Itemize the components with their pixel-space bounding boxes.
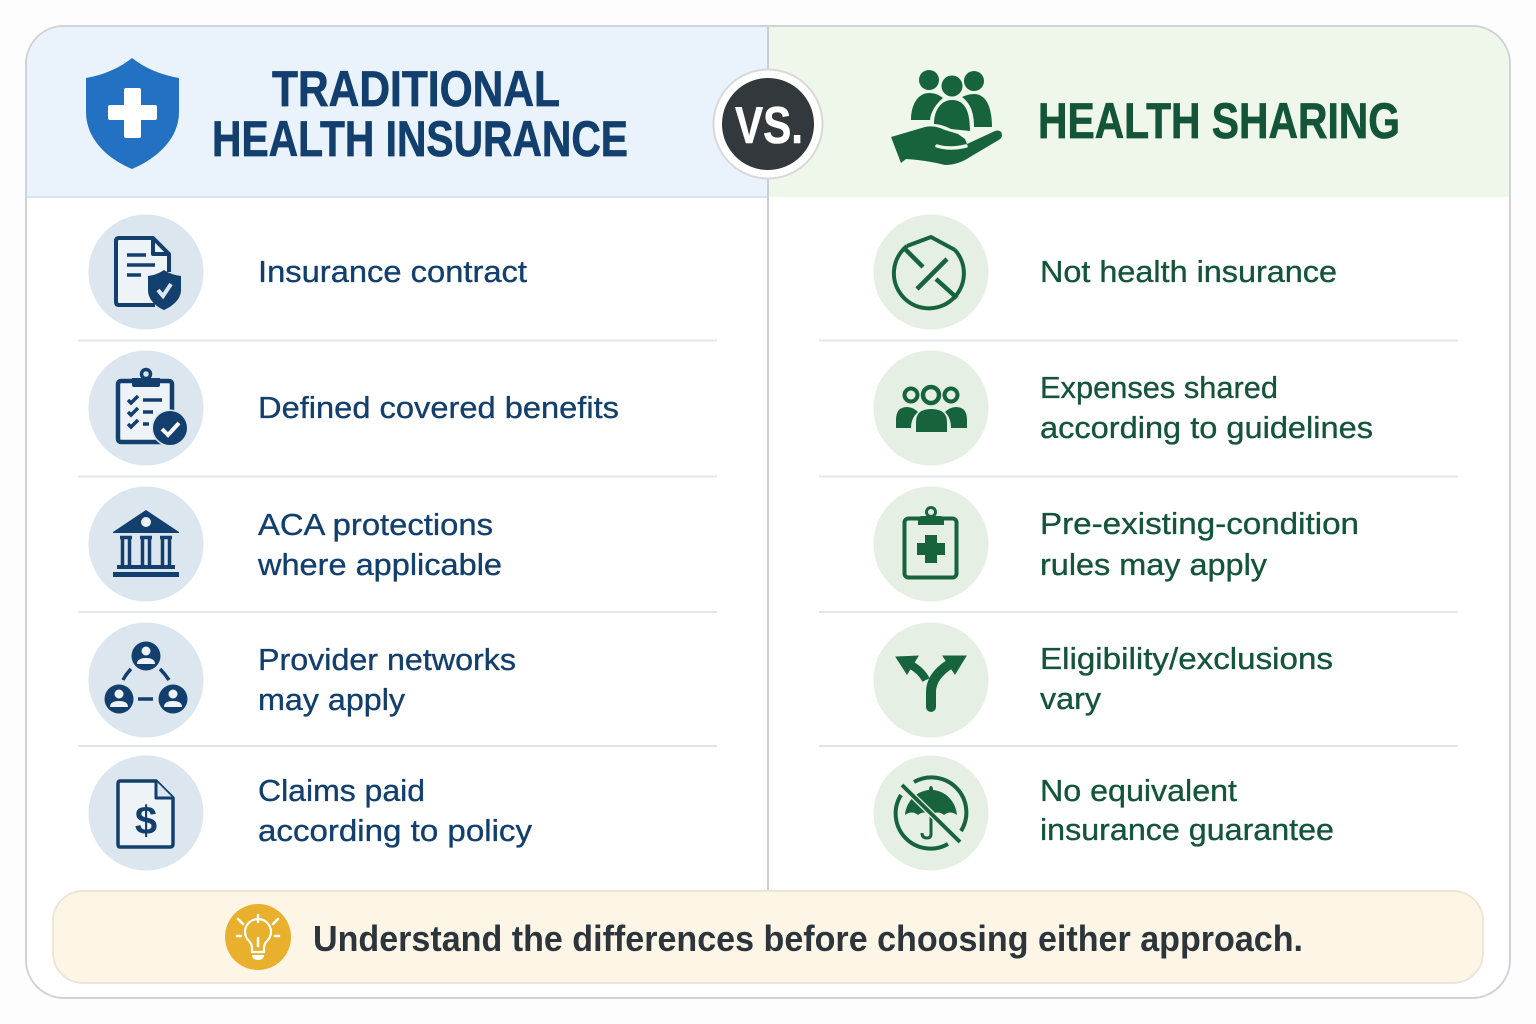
- icon: forking arrows: [874, 622, 988, 738]
- label: defined covered benefits: Defined covered benefits: [258, 390, 619, 425]
- heading: traditional health insurance: [212, 61, 628, 167]
- label: no guarantee: No equivalent: [1040, 773, 1237, 808]
- icon: clipboard checklist: [88, 350, 204, 466]
- label: provider networks: Provider networks: [258, 642, 516, 677]
- label: aca protections: where applicable: [257, 547, 502, 582]
- header: health sharing background: [769, 27, 1509, 197]
- label: claims paid: Claims paid: [258, 773, 425, 808]
- label: insurance contract: Insurance contract: [258, 254, 527, 289]
- icon: bill with dollar: $: [135, 799, 157, 843]
- label: pre-existing condition: rules may apply: [1040, 547, 1268, 582]
- label: expenses shared: Expenses shared: [1040, 370, 1278, 405]
- badge: vs: VS.: [735, 97, 803, 155]
- label: expenses shared: according to guidelines: [1040, 410, 1373, 445]
- icon: government building: [88, 486, 204, 602]
- row: eligibility: [874, 622, 1333, 738]
- icon: umbrella crossed out: [874, 756, 988, 870]
- icon: hand holding people: [891, 70, 1002, 165]
- heading: health sharing: HEALTH SHARING: [1038, 93, 1400, 149]
- label: claims paid: [258, 773, 533, 848]
- heading: traditional health insurance: HEALTH INSURANCE: [212, 111, 628, 167]
- icon: contract with shield: [88, 214, 204, 330]
- row: provider networks: [88, 622, 516, 738]
- text: takeaway: Understand the differences before choosing either approach.: [313, 918, 1303, 959]
- row: defined covered benefits: [88, 350, 619, 466]
- panel: health sharing: [769, 27, 1509, 870]
- label: pre-existing condition: Pre-existing-condition: [1040, 506, 1359, 541]
- callout: takeaway banner: [53, 891, 1483, 983]
- badge: vs: [714, 70, 822, 178]
- row: insurance contract: [88, 214, 527, 330]
- label: aca protections: [257, 507, 502, 582]
- row: pre-existing condition: [874, 486, 1359, 602]
- icon: group of three people: [874, 350, 988, 466]
- header: traditional background: [27, 27, 768, 197]
- label: eligibility: vary: [1040, 681, 1102, 716]
- icon: medical clipboard: [874, 486, 988, 602]
- label: aca protections: ACA protections: [258, 507, 493, 542]
- label: claims paid: according to policy: [258, 813, 533, 848]
- icon: blue shield with cross: [86, 58, 179, 169]
- label: eligibility: Eligibility/exclusions: [1040, 641, 1333, 676]
- label: pre-existing condition: [1040, 506, 1359, 582]
- icon: bill with dollar: [88, 756, 204, 870]
- label: expenses shared: [1040, 370, 1373, 445]
- label: provider networks: may apply: [258, 682, 406, 717]
- heading: traditional health insurance: TRADITIONAL: [272, 61, 560, 117]
- label: not health insurance: Not health insurance: [1040, 254, 1337, 289]
- label: no guarantee: [1040, 773, 1334, 847]
- icon: provider network: [88, 622, 204, 738]
- icon: crossed-out shield: [874, 214, 988, 330]
- icon: light bulb: [225, 904, 291, 970]
- label: eligibility: [1040, 641, 1333, 716]
- row: expenses shared: [874, 350, 1373, 466]
- row: no guarantee: [874, 756, 1334, 870]
- row: claims paid: [88, 756, 533, 870]
- row: aca protections: [88, 486, 502, 602]
- label: no guarantee: insurance guarantee: [1040, 812, 1334, 847]
- row: not health insurance: [874, 214, 1337, 330]
- label: provider networks: [258, 642, 516, 717]
- panel: traditional health insurance: [27, 27, 768, 870]
